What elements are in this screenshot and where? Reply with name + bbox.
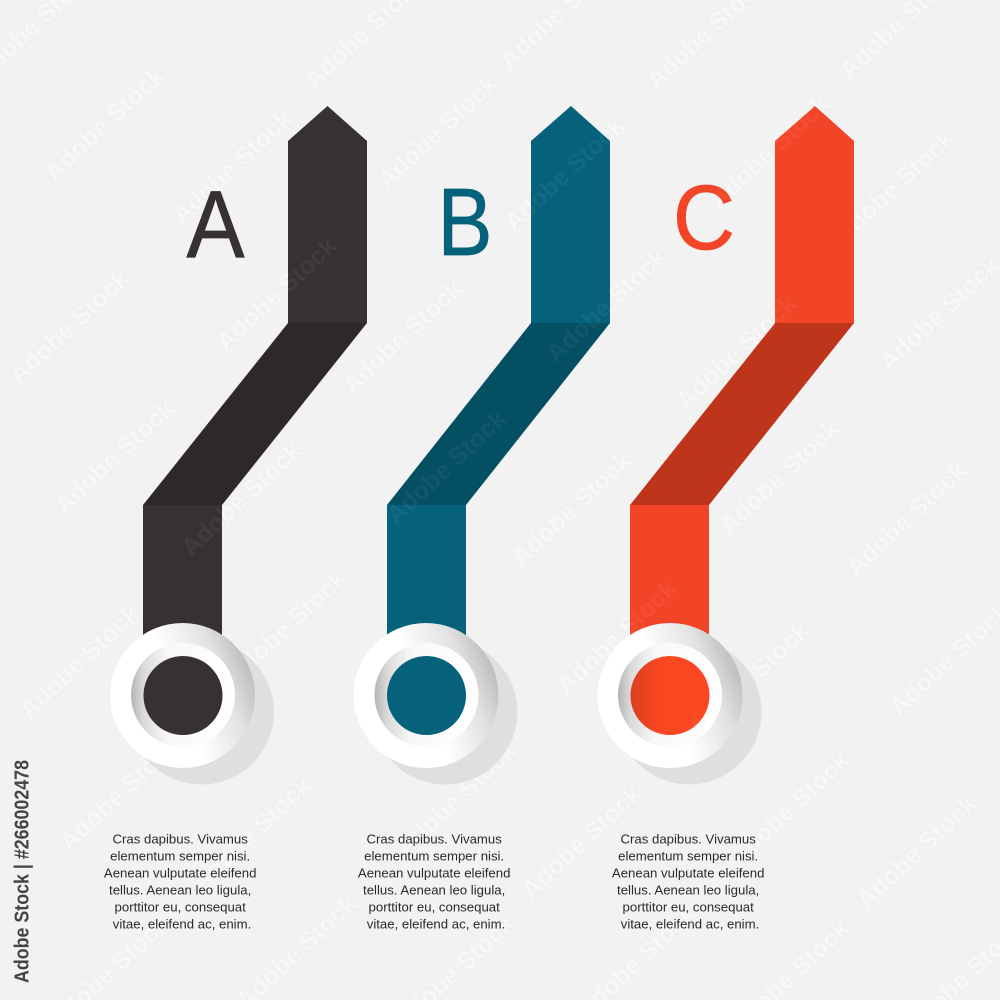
- description A: Aenean vulputate eleifend: [104, 866, 256, 880]
- watermarks over ribbons: Adobe Stock: [541, 243, 672, 367]
- watermarks: Adobe Stock: [841, 457, 972, 581]
- watermarks: Adobe Stock: [499, 112, 630, 236]
- letter C: C: [673, 167, 735, 269]
- description C: vitae, eleifend ac, enim.: [621, 916, 759, 932]
- watermarks over ribbons: Adobe Stock: [551, 575, 682, 699]
- watermarks over ribbons: Adobe Stock: [499, 112, 630, 236]
- watermarks over ribbons: Adobe Stock: [671, 290, 802, 414]
- watermarks over ribbons: [176, 90, 835, 741]
- description C: porttitor eu, consequat: [623, 900, 754, 914]
- watermarks: Adobe Stock: [337, 275, 468, 399]
- description A: tellus. Aenean leo ligula,: [109, 882, 251, 898]
- watermarks: Adobe Stock: [684, 617, 815, 741]
- description B: tellus. Aenean leo ligula,: [363, 882, 505, 898]
- circle node A: [110, 623, 274, 784]
- watermarks: Adobe Stock: [851, 790, 982, 914]
- watermarks: Adobe Stock: [176, 437, 307, 561]
- watermarks: Adobe Stock: [551, 575, 682, 699]
- description A: elementum semper nisi.: [110, 848, 250, 864]
- circle node C: [598, 623, 762, 784]
- column B: [354, 106, 610, 932]
- column C: [598, 106, 854, 932]
- watermarks: Adobe Stock: [221, 565, 352, 689]
- description C: Aenean vulputate eleifend: [612, 866, 764, 880]
- watermarks: Adobe Stock: [211, 232, 342, 356]
- watermarks: Adobe Stock: [714, 415, 845, 539]
- description A: vitae, eleifend ac, enim.: [113, 916, 251, 932]
- watermarks: Adobe Stock: [506, 447, 637, 571]
- description B: Aenean vulputate eleifend: [358, 866, 510, 880]
- description B: elementum semper nisi.: [364, 848, 504, 864]
- description B: vitae, eleifend ac, enim.: [367, 916, 505, 932]
- description A: Cras dapibus. Vivamus: [112, 832, 248, 846]
- watermarks: Adobe Stock: [4, 265, 135, 389]
- watermarks over ribbons: Adobe Stock: [704, 90, 835, 214]
- watermarks: Adobe Stock: [516, 780, 647, 904]
- watermarks: Adobe Stock: [724, 747, 855, 871]
- watermarks: Adobe Stock: [39, 62, 170, 186]
- column A: [104, 106, 367, 932]
- description A: porttitor eu, consequat: [115, 900, 246, 914]
- watermarks: Adobe Stock: [381, 405, 512, 529]
- watermarks: Adobe Stock: [671, 290, 802, 414]
- watermarks over ribbons: Adobe Stock: [211, 232, 342, 356]
- ribbon arrow A: [143, 106, 367, 640]
- watermarks over ribbons: Adobe Stock: [684, 617, 815, 741]
- watermarks: Adobe Stock: [391, 737, 522, 861]
- watermarks: Adobe Stock: [186, 772, 317, 896]
- ribbon arrow C: [630, 106, 854, 640]
- watermarks: Adobe Stock: [372, 70, 503, 194]
- circle node B: [354, 623, 518, 784]
- watermarks: Adobe Stock: [167, 105, 298, 229]
- stock id vertical text: Adobe Stock | #266002478: [12, 760, 34, 983]
- watermarks: Adobe Stock: [541, 243, 672, 367]
- description C: elementum semper nisi.: [618, 848, 758, 864]
- description B: Cras dapibus. Vivamus: [366, 832, 502, 846]
- watermarks: Adobe Stock: [829, 125, 960, 249]
- ribbon arrow B: [387, 106, 610, 640]
- watermarks: Adobe Stock: [704, 90, 835, 214]
- description B: porttitor eu, consequat: [369, 900, 500, 914]
- watermarks: Adobe Stock: [49, 395, 180, 519]
- watermarks over ribbons: Adobe Stock: [176, 437, 307, 561]
- description C: Cras dapibus. Vivamus: [620, 832, 756, 846]
- watermarks over ribbons: Adobe Stock: [381, 405, 512, 529]
- description C: tellus. Aenean leo ligula,: [617, 882, 759, 898]
- letter B: B: [438, 169, 492, 276]
- watermarks: Adobe Stock: [54, 732, 185, 856]
- watermarks: Adobe Stock: [14, 600, 145, 724]
- letter A: A: [186, 172, 244, 278]
